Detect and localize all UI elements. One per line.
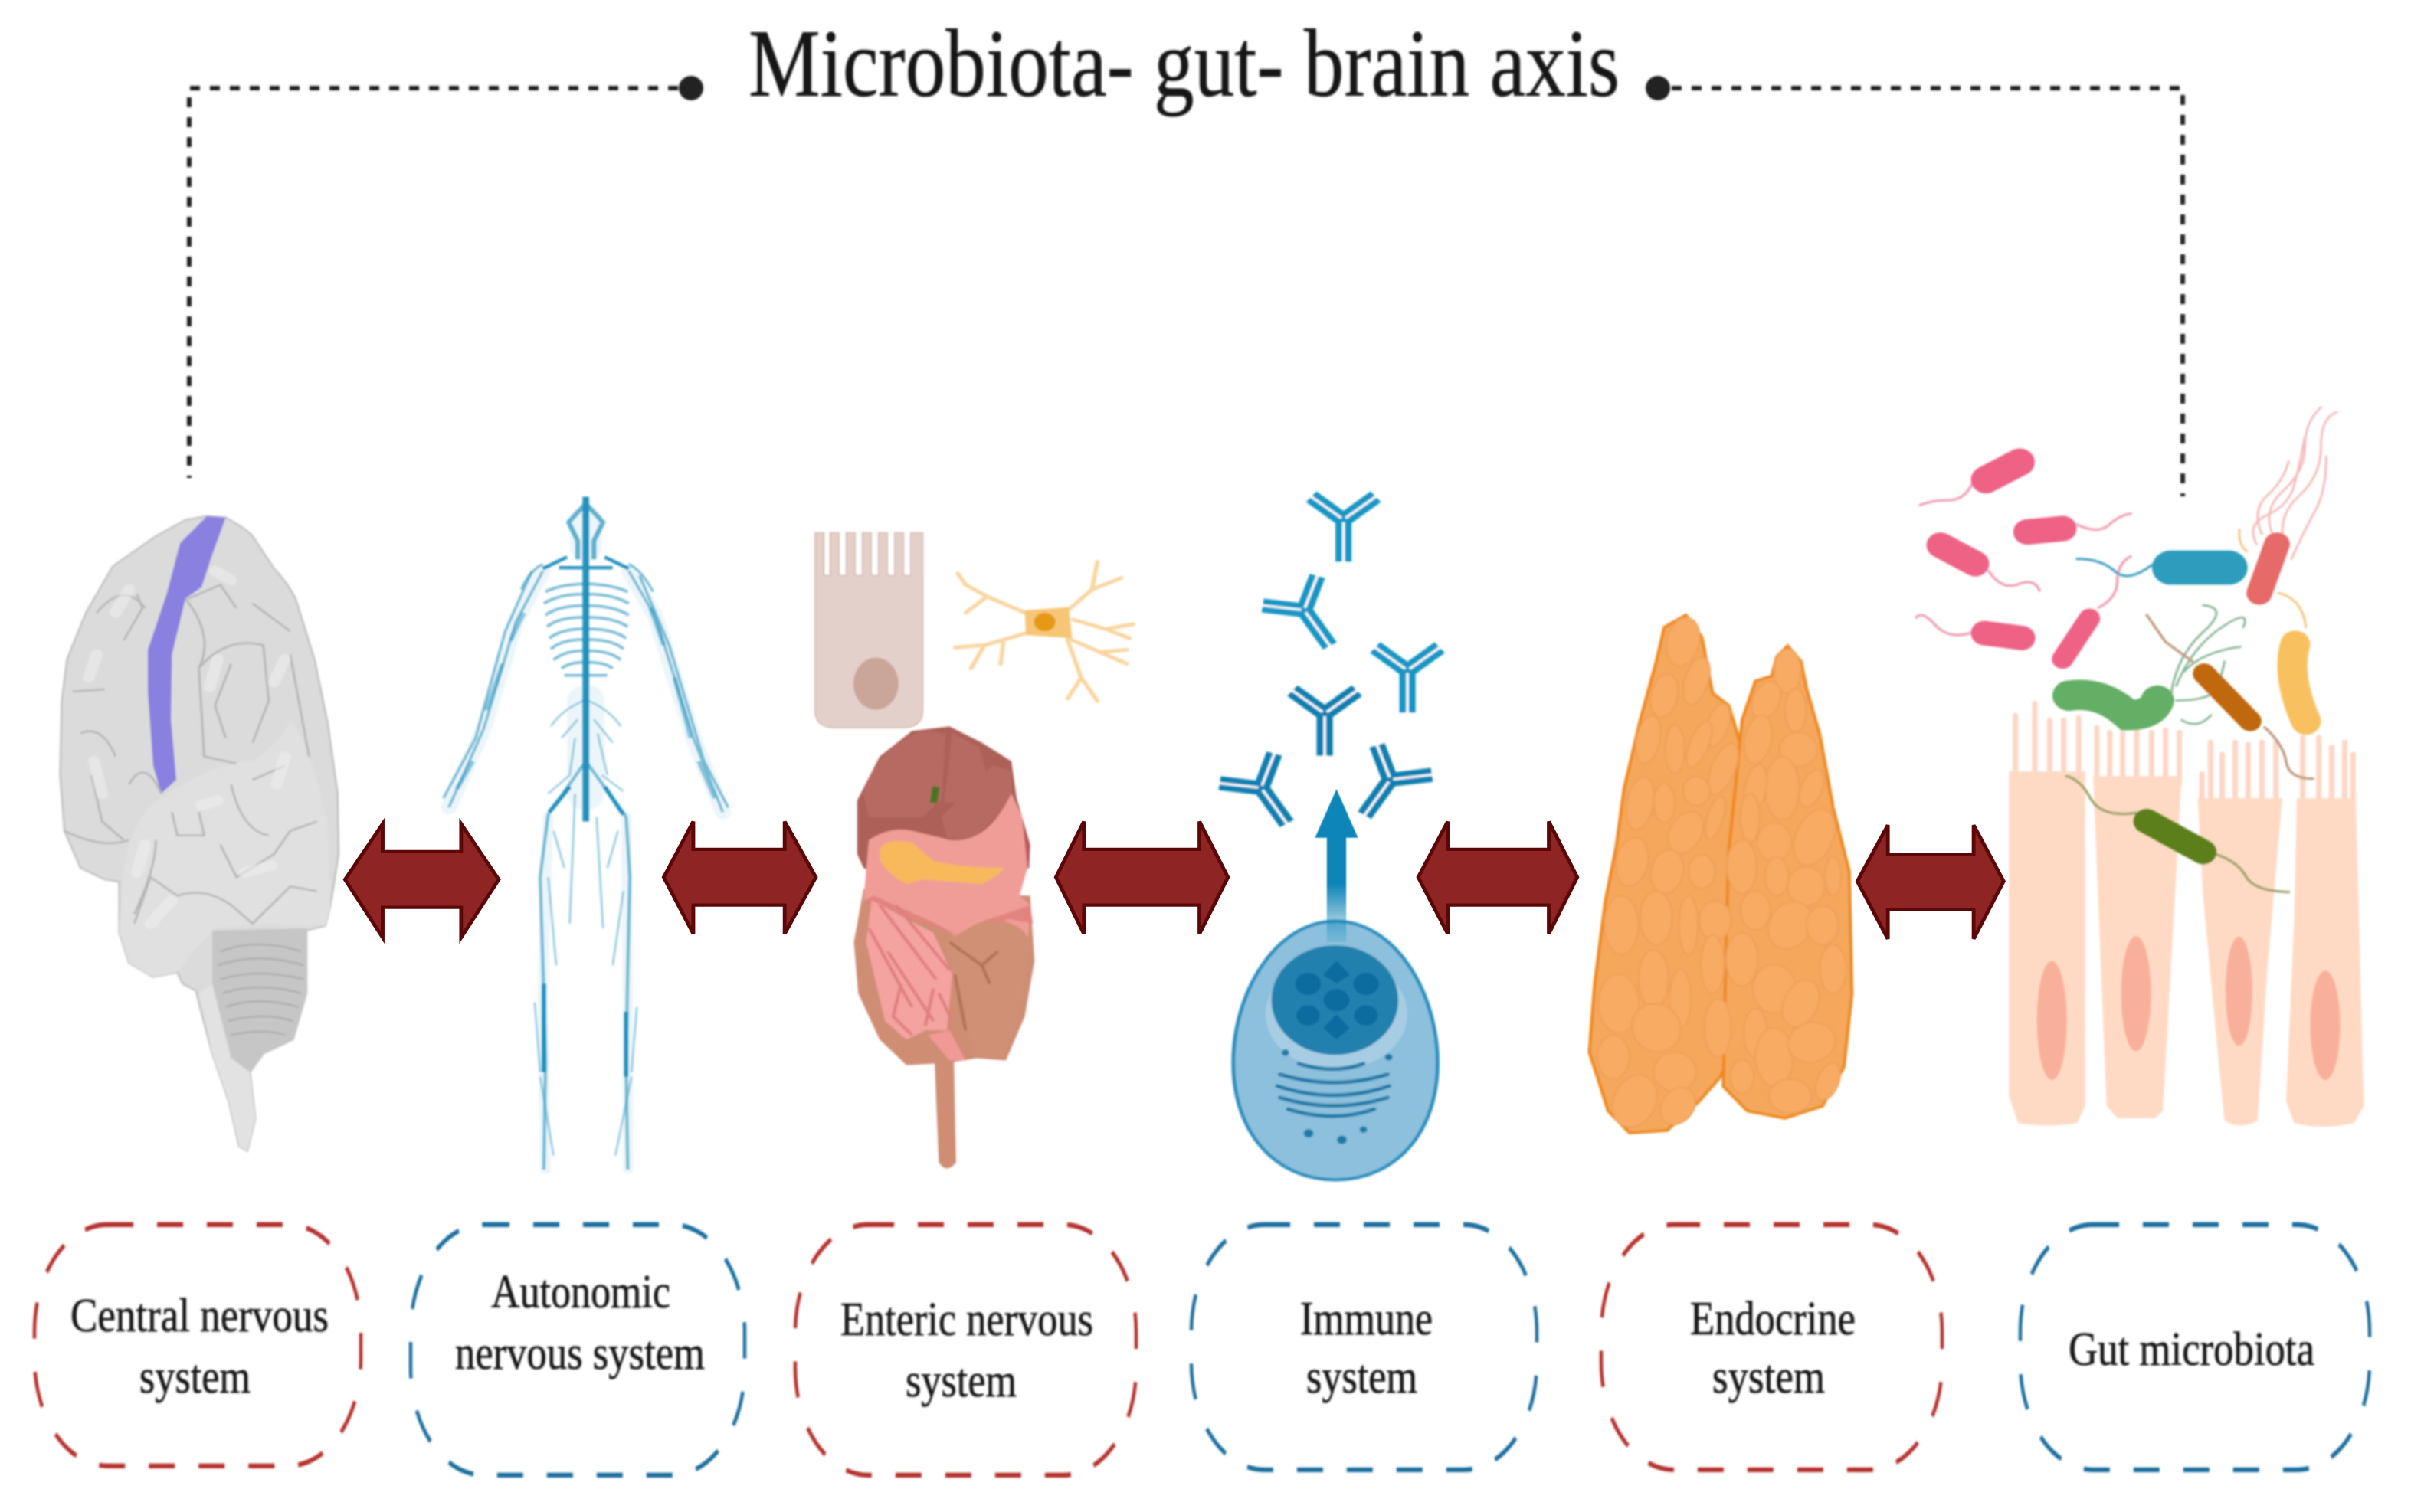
panel: enteric nervous system — [795, 1225, 1136, 1475]
icon: antibodies — [1216, 494, 1443, 840]
panel: immune system: Immune — [1300, 1293, 1433, 1345]
title: Microbiota- gut- brain axis — [749, 11, 1620, 117]
icon: enterocyte cell — [815, 533, 922, 728]
arrow: endocrine to gut microbiota — [1857, 825, 2003, 939]
icon: gut bacteria — [1916, 407, 2337, 892]
dotted bracket connector — [189, 76, 2183, 496]
panel: enteric nervous system: Enteric nervous — [840, 1294, 1093, 1346]
icon: neuron — [955, 561, 1133, 701]
arrow: immune to endocrine — [1418, 822, 1577, 934]
panel: autonomic nervous system — [411, 1225, 745, 1475]
arrow: antibody secretion — [1315, 789, 1358, 942]
arrow: central to autonomic — [345, 824, 499, 938]
icon: brain — [61, 516, 339, 1151]
panel: immune system: system — [1306, 1351, 1417, 1403]
panel: endocrine system: system — [1712, 1351, 1825, 1403]
panel: gut microbiota — [2020, 1225, 2370, 1470]
panel: endocrine system — [1601, 1225, 1942, 1470]
panel: immune system — [1191, 1225, 1537, 1470]
panel: gut microbiota: Gut microbiota — [2069, 1324, 2314, 1376]
arrow: autonomic to enteric — [663, 822, 816, 934]
panel: central nervous system — [34, 1225, 361, 1466]
panel: autonomic nervous system: Autonomic — [491, 1266, 670, 1318]
icon: nervous system figure — [444, 496, 729, 1170]
arrow: enteric to immune — [1056, 822, 1228, 934]
panel: central nervous system: Central nervous — [70, 1290, 329, 1342]
icon: digestive organs — [854, 726, 1034, 1168]
panel: central nervous system: system — [139, 1351, 251, 1403]
icon: intestinal epithelium cells — [2009, 703, 2364, 1127]
panel: autonomic nervous system: nervous system — [455, 1327, 705, 1379]
panel: enteric nervous system: system — [906, 1355, 1017, 1407]
icon: pancreas / endocrine gland — [1589, 615, 1852, 1133]
panel: endocrine system: Endocrine — [1690, 1293, 1856, 1345]
icon: plasma cell — [1233, 921, 1437, 1180]
